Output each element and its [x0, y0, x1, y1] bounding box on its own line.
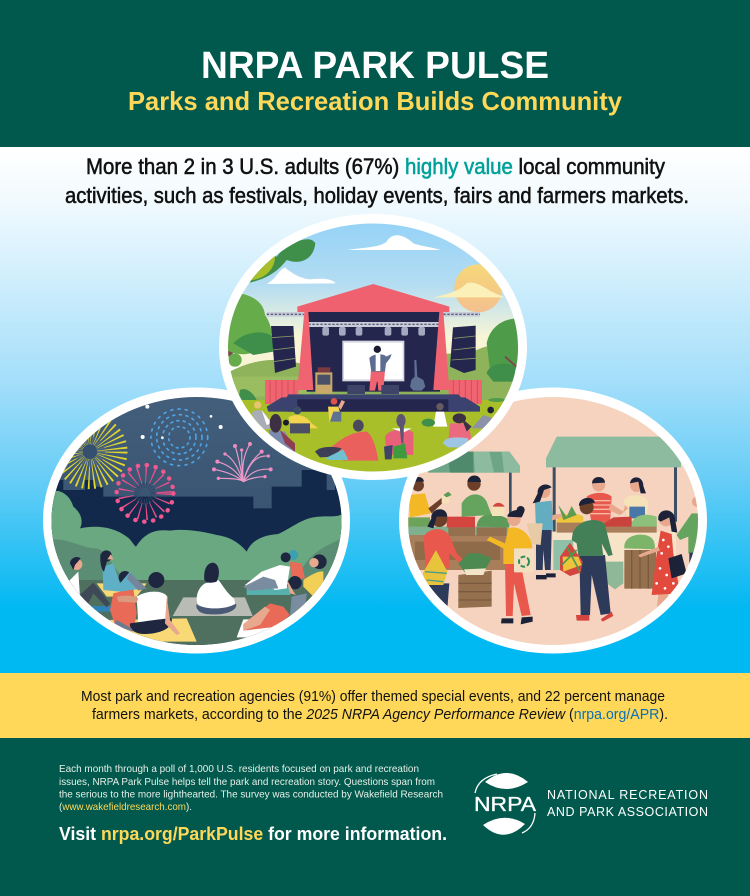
awning: left	[428, 452, 520, 519]
stars	[141, 405, 223, 439]
footer band	[0, 738, 750, 896]
methodology note	[59, 764, 443, 813]
woman yellow top with recycling tote	[487, 506, 534, 624]
illustration: outdoor concert circle	[210, 214, 530, 480]
NRPA logo	[474, 773, 708, 835]
roof	[297, 284, 449, 312]
hills	[227, 344, 523, 410]
call to action: Visit nrpa.org/ParkPulse for more information.	[59, 824, 447, 844]
couple on blanket	[110, 571, 180, 635]
title: NRPA PARK PULSE	[201, 45, 549, 87]
header band	[0, 0, 750, 147]
woman red top with yellow net bag	[423, 509, 465, 610]
headline statistic	[65, 154, 689, 208]
performer	[369, 346, 392, 391]
methodology note: the serious to the more lighthearted. The survey was conducted by Wakefield Research	[59, 790, 443, 800]
vendors right	[587, 477, 648, 523]
net bag of greens	[605, 562, 623, 589]
firework: pink fan	[212, 442, 273, 482]
stage skirts	[265, 380, 482, 404]
man seated left	[67, 557, 110, 607]
person: white dress	[422, 403, 447, 427]
stage lights	[322, 327, 425, 336]
audience	[252, 398, 494, 461]
firework: magenta	[117, 465, 173, 522]
crate with greens	[458, 553, 492, 608]
logo wordmark: AND PARK ASSOCIATION	[547, 805, 708, 819]
logo emblem	[474, 773, 537, 835]
monitors	[347, 385, 399, 394]
city silhouette	[50, 470, 350, 587]
right stall frame	[553, 465, 556, 532]
methodology note: Each month through a poll of 1,000 U.S. residents focused on park and recreation	[59, 764, 419, 775]
trees: left	[220, 239, 315, 367]
crate right with cabbages	[624, 535, 656, 589]
methodology note: (www.wakefieldresearch.com).	[59, 802, 192, 813]
awning: right	[546, 437, 681, 467]
group on right	[243, 550, 327, 631]
screen	[342, 341, 404, 381]
platform and stairs	[267, 394, 480, 412]
illustration: fireworks viewing circle	[43, 388, 350, 654]
firework: yellow	[68, 430, 112, 473]
logo wordmark	[547, 788, 708, 819]
illustration: farmers market circle	[399, 388, 707, 654]
woman blue top	[527, 485, 562, 579]
person: woman teal	[100, 550, 147, 592]
person: red shirt reclining	[315, 420, 378, 461]
person: blond back left	[252, 401, 272, 430]
left vendors	[408, 475, 505, 517]
truss	[267, 312, 480, 327]
produce and counter right	[557, 505, 657, 533]
lawn	[242, 400, 504, 472]
logo emblem: NRPA	[474, 794, 537, 816]
curtains	[297, 312, 449, 390]
man green at edge	[676, 496, 698, 564]
person: arm raised with cap	[328, 398, 345, 422]
person: white shirt center	[196, 563, 236, 614]
blankets	[173, 597, 253, 616]
man green sweater	[560, 498, 613, 622]
stage back	[307, 312, 440, 392]
woman red polka dress	[638, 510, 687, 610]
trees: right	[487, 318, 518, 382]
guitar	[410, 360, 425, 391]
yellow callout band: farmers markets, according to the 2025 NRPA Agency Performance Review (nrpa.org/APR).	[92, 707, 668, 723]
methodology note: issues, NRPA Park Pulse helps tell the park and recreation story. Questions span from	[59, 777, 435, 788]
bushes	[52, 536, 58, 559]
speakers	[271, 326, 476, 373]
person: navy at right	[472, 407, 494, 428]
firework: blue	[151, 409, 208, 466]
person: yellow top	[288, 406, 318, 433]
subtitle: Parks and Recreation Builds Community	[128, 86, 623, 116]
headline statistic: activities, such as festivals, holiday events, fairs and farmers markets.	[65, 183, 689, 208]
person: pink with dark hair	[443, 413, 472, 447]
logo wordmark: NATIONAL RECREATION	[547, 788, 708, 802]
person: long hair with backpack	[384, 414, 413, 459]
sun	[433, 264, 505, 312]
yellow callout band	[0, 673, 750, 738]
left stall counter	[408, 514, 509, 570]
yellow callout band: Most park and recreation agencies (91%) offer themed special events, and 22 percent manage	[81, 689, 665, 705]
person: dark hair pink	[268, 414, 295, 452]
amp	[315, 367, 332, 394]
ground	[69, 580, 324, 645]
clouds	[267, 235, 441, 284]
headline statistic: More than 2 in 3 U.S. adults (67%) highly value local community	[86, 154, 665, 179]
